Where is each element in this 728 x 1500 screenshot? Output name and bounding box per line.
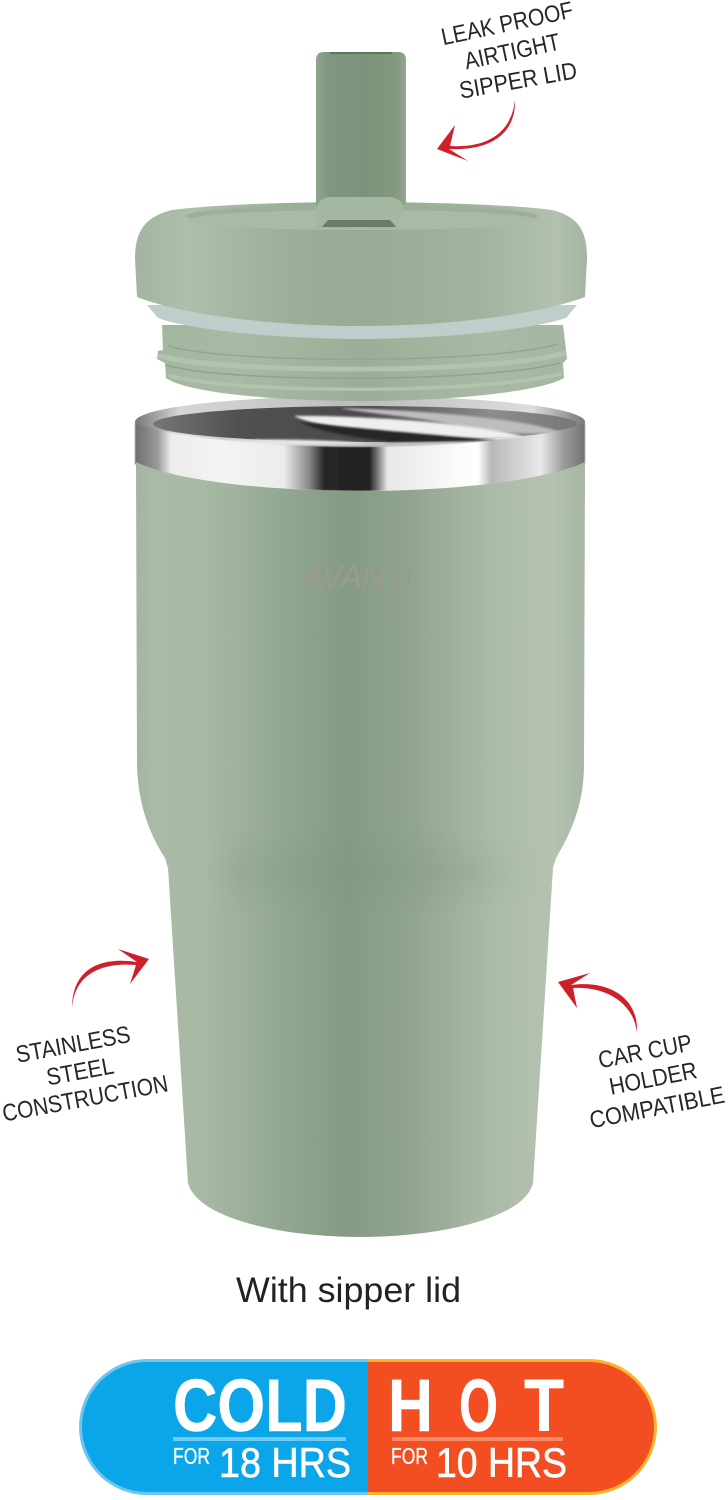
lid cap [135, 202, 587, 326]
callout: leak proof airtight sipper lid: AIRTIGHT [462, 29, 563, 75]
callout: car cup holder compatible: CAR CUP [596, 1030, 694, 1074]
callout: leak proof airtight sipper lid [439, 0, 579, 105]
lid threads [157, 325, 567, 401]
temperature badge [79, 1359, 657, 1495]
panel: hot: O [459, 1364, 498, 1447]
callout: car cup holder compatible [587, 1030, 727, 1134]
panel: hot: H [388, 1364, 433, 1447]
tumbler with lid [135, 52, 587, 1237]
panel: cold: FOR [173, 1443, 210, 1469]
panel: cold: 18 HRS [219, 1439, 351, 1486]
sipper straw [316, 52, 406, 228]
lid seal ring [147, 305, 577, 339]
brand mark: AVANTI [300, 558, 413, 595]
panel: cold [79, 1359, 368, 1495]
panel: cold: COLD [173, 1364, 347, 1447]
panel: hot [368, 1359, 657, 1495]
arrow: to body, left [72, 949, 149, 1009]
arrow: to body, right [558, 973, 637, 1033]
caption: With sipper lid [236, 1271, 461, 1310]
tumbler body [136, 462, 585, 1237]
callout: stainless steel construction [0, 1021, 170, 1128]
callout: stainless steel construction: CONSTRUCTION [0, 1070, 170, 1128]
callout: stainless steel construction: STAINLESS [14, 1021, 133, 1069]
arrow: to lid [437, 100, 515, 161]
tumbler rim (stainless steel) [135, 396, 585, 491]
panel: hot: T [524, 1364, 564, 1447]
callout: stainless steel construction: STEEL [44, 1053, 116, 1091]
panel: hot: FOR [391, 1443, 428, 1469]
straw base tab [316, 197, 404, 228]
callout: car cup holder compatible: HOLDER [607, 1057, 699, 1101]
panel: hot: 10 HRS [436, 1439, 567, 1486]
callout: leak proof airtight sipper lid: SIPPER LID [457, 57, 579, 105]
